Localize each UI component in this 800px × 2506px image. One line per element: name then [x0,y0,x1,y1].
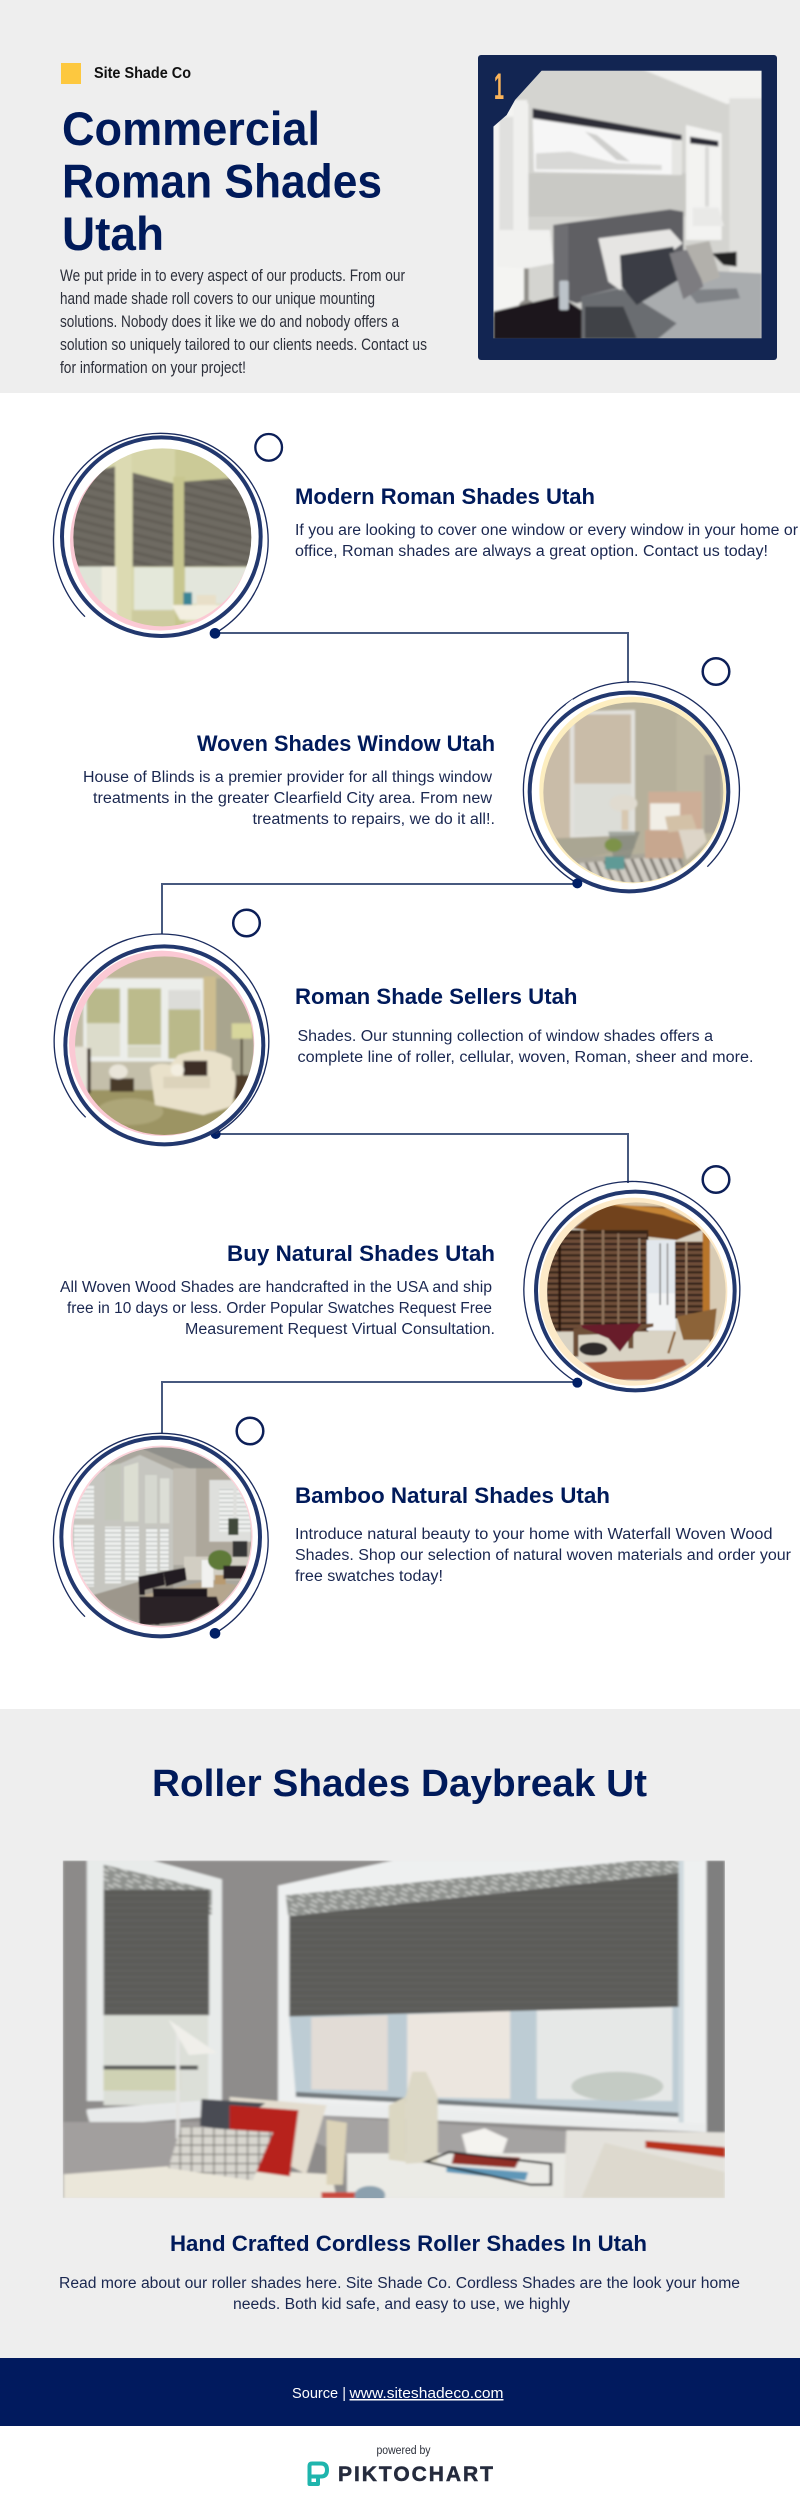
item 2: text: treatments in the greater Clearfield City area. From new [93,790,493,807]
photo: roman shade living room [73,955,257,1138]
subheading: Hand Crafted Cordless Roller Shades In Utah [170,2231,647,2256]
item 5: text: Introduce natural beauty to your home with Waterfall Woven Wood [295,1526,772,1543]
small circle [255,434,282,461]
outer arc [53,433,268,633]
pink backing [69,951,254,1136]
item 4: text: All Woven Wood Shades are handcrafted in the USA and ship [60,1279,492,1296]
item 5: circular photo [53,1433,268,1639]
item 2: text [83,731,495,828]
item 2: small circle [703,658,729,685]
item 5: text: Bamboo Natural Shades Utah [295,1483,610,1508]
connector dot [211,1129,221,1139]
connector lines [162,633,628,1434]
wordmark: PIKTOCHART [338,2463,493,2486]
item 2: circular photo [523,682,739,891]
item 5: text [295,1483,791,1585]
cream backing [539,1198,727,1386]
item 4: small circle [703,1166,729,1193]
item 3: circular photo [54,934,269,1144]
pink backing [71,1446,253,1628]
photo: woven shades [540,698,730,888]
title: Roman Shades [62,154,382,208]
intro text: hand made shade roll covers to our unique mounting [60,289,375,308]
photo: roman shades [73,448,252,626]
item 3: small circle [233,910,260,936]
intro text: solutions. Nobody does it like we do and nobody offers a [60,312,399,331]
ring [530,693,728,891]
outer arc [54,934,269,1134]
connector dot [210,1628,220,1639]
brand name: Site Shade Co [94,65,191,82]
intro text [60,266,427,377]
ring [536,1192,735,1390]
description: needs. Both kid safe, and easy to use, we highly [233,2296,570,2313]
item 3: text [295,984,754,1066]
ring [62,437,261,636]
intro text: solution so uniquely tailored to our clients needs. Contact us [60,335,427,354]
title: Commercial [62,102,320,155]
source line: Source | [292,2385,346,2402]
item 4: text: Buy Natural Shades Utah [227,1241,495,1266]
item 1: text: office, Roman shades are always a great option. Contact us today! [295,543,768,560]
yellow backing [539,697,726,883]
source link: www.siteshadeco.com [348,2385,504,2402]
title: Utah [62,207,164,260]
title [62,102,382,260]
ring [61,1438,260,1636]
item 2: text: Woven Shades Window Utah [197,731,495,756]
intro text: for information on your project! [60,358,246,377]
outer arc [524,1181,740,1383]
description: Read more about our roller shades here. Site Shade Co. Cordless Shades are the look your home [59,2275,740,2292]
item 5: small circle [237,1418,263,1444]
item 2: text: treatments to repairs, we do it all!. [252,811,495,828]
description [59,2275,740,2313]
item 2: text: House of Blinds is a premier provider for all things window [83,769,493,786]
item 1: text [295,484,798,560]
connector dot [572,878,582,888]
item 1: circular photo [53,433,282,639]
item 4: text: free in 10 days or less. Order Popular Swatches Request Free [67,1300,492,1317]
item 3: text: Roman Shade Sellers Utah [295,984,578,1009]
item 3: text: Shades. Our stunning collection of window shades offers a [298,1028,713,1045]
item 1: text: Modern Roman Shades Utah [295,484,595,509]
panel: header: 1 [494,66,504,107]
powered by: powered by [376,2445,431,2457]
item 4: circular photo [524,1181,740,1390]
panel: roller shades [0,1709,800,2358]
photo: natural shades [545,1200,728,1383]
outer arc [53,1433,268,1633]
icon: piktochart logo [310,2464,327,2484]
outer arc [523,682,739,883]
icon: logo square [61,63,81,84]
ring [65,946,263,1144]
photo: bamboo shutters dining room [70,1445,257,1632]
photo frame [478,55,777,360]
section heading: Roller Shades Daybreak Ut [152,1763,647,1805]
item 4: text: Measurement Request Virtual Consultation. [185,1321,495,1338]
connector dot [210,628,220,639]
ring and pink backing [70,451,250,631]
item 4: text [60,1241,495,1338]
piktochart branding [310,2445,493,2486]
item 5: text: free swatches today! [295,1568,443,1585]
panel: source footer [0,2358,800,2426]
connector dot [572,1378,582,1388]
item 3: text: complete line of roller, cellular, woven, Roman, sheer and more. [298,1049,754,1066]
panel: header [0,0,800,393]
roller shades photo [63,1860,725,2204]
item 1: text: If you are looking to cover one window or every window in your home or [295,522,798,539]
item 5: text: Shades. Shop our selection of natural woven materials and order your [295,1547,791,1564]
intro text: We put pride in to every aspect of our products. From our [60,266,405,285]
bedroom photo [490,67,767,343]
